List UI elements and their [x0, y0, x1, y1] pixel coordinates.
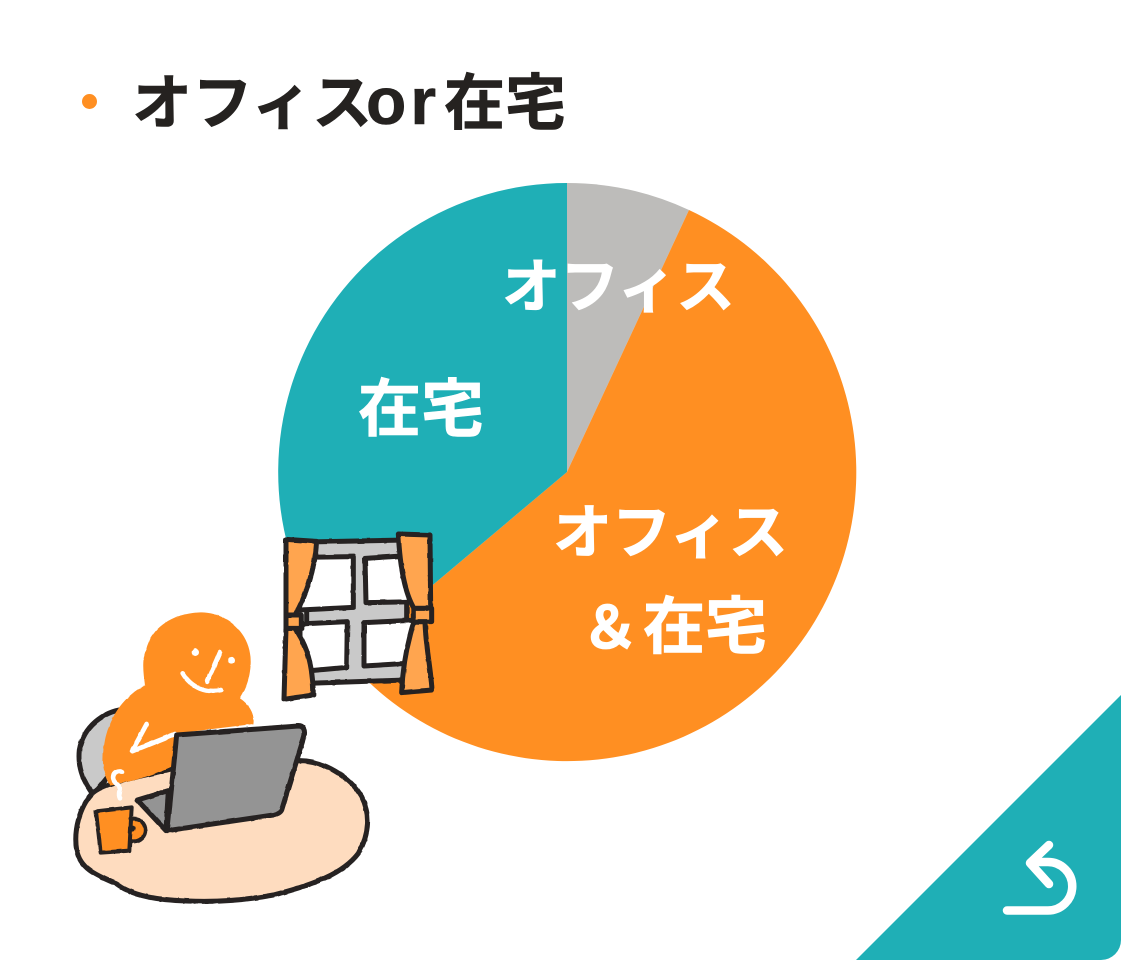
left curtain [284, 539, 317, 699]
slice: office [567, 183, 689, 472]
label: home: 在宅 [358, 375, 484, 445]
face and arm [132, 650, 233, 751]
label: office and home: オフィス [553, 500, 788, 566]
title: オフィス [132, 70, 373, 137]
right curtain [398, 534, 432, 693]
right curtain tie [413, 608, 432, 622]
icon: return arrow [1007, 845, 1072, 910]
chair [79, 709, 127, 795]
title bullet [82, 94, 97, 109]
steam [113, 771, 122, 798]
title: 在宅 [444, 69, 566, 137]
slice: home [278, 183, 567, 658]
mug [96, 807, 145, 853]
window panes [300, 555, 418, 672]
illustration: window [284, 534, 432, 699]
table [76, 761, 368, 901]
back button corner [856, 695, 1121, 960]
label: office: オフィス [502, 255, 735, 320]
corner triangle [856, 695, 1121, 960]
label: office and home: 在宅 [643, 593, 767, 662]
label: office and home: ＆ [581, 596, 639, 661]
window frame [307, 540, 407, 683]
person [103, 612, 254, 785]
slice: office and home [346, 210, 856, 761]
illustration: person at laptop [76, 612, 368, 901]
laptop [137, 726, 305, 831]
pie chart [278, 183, 856, 761]
title: or [366, 64, 440, 138]
left curtain tie [286, 615, 301, 628]
